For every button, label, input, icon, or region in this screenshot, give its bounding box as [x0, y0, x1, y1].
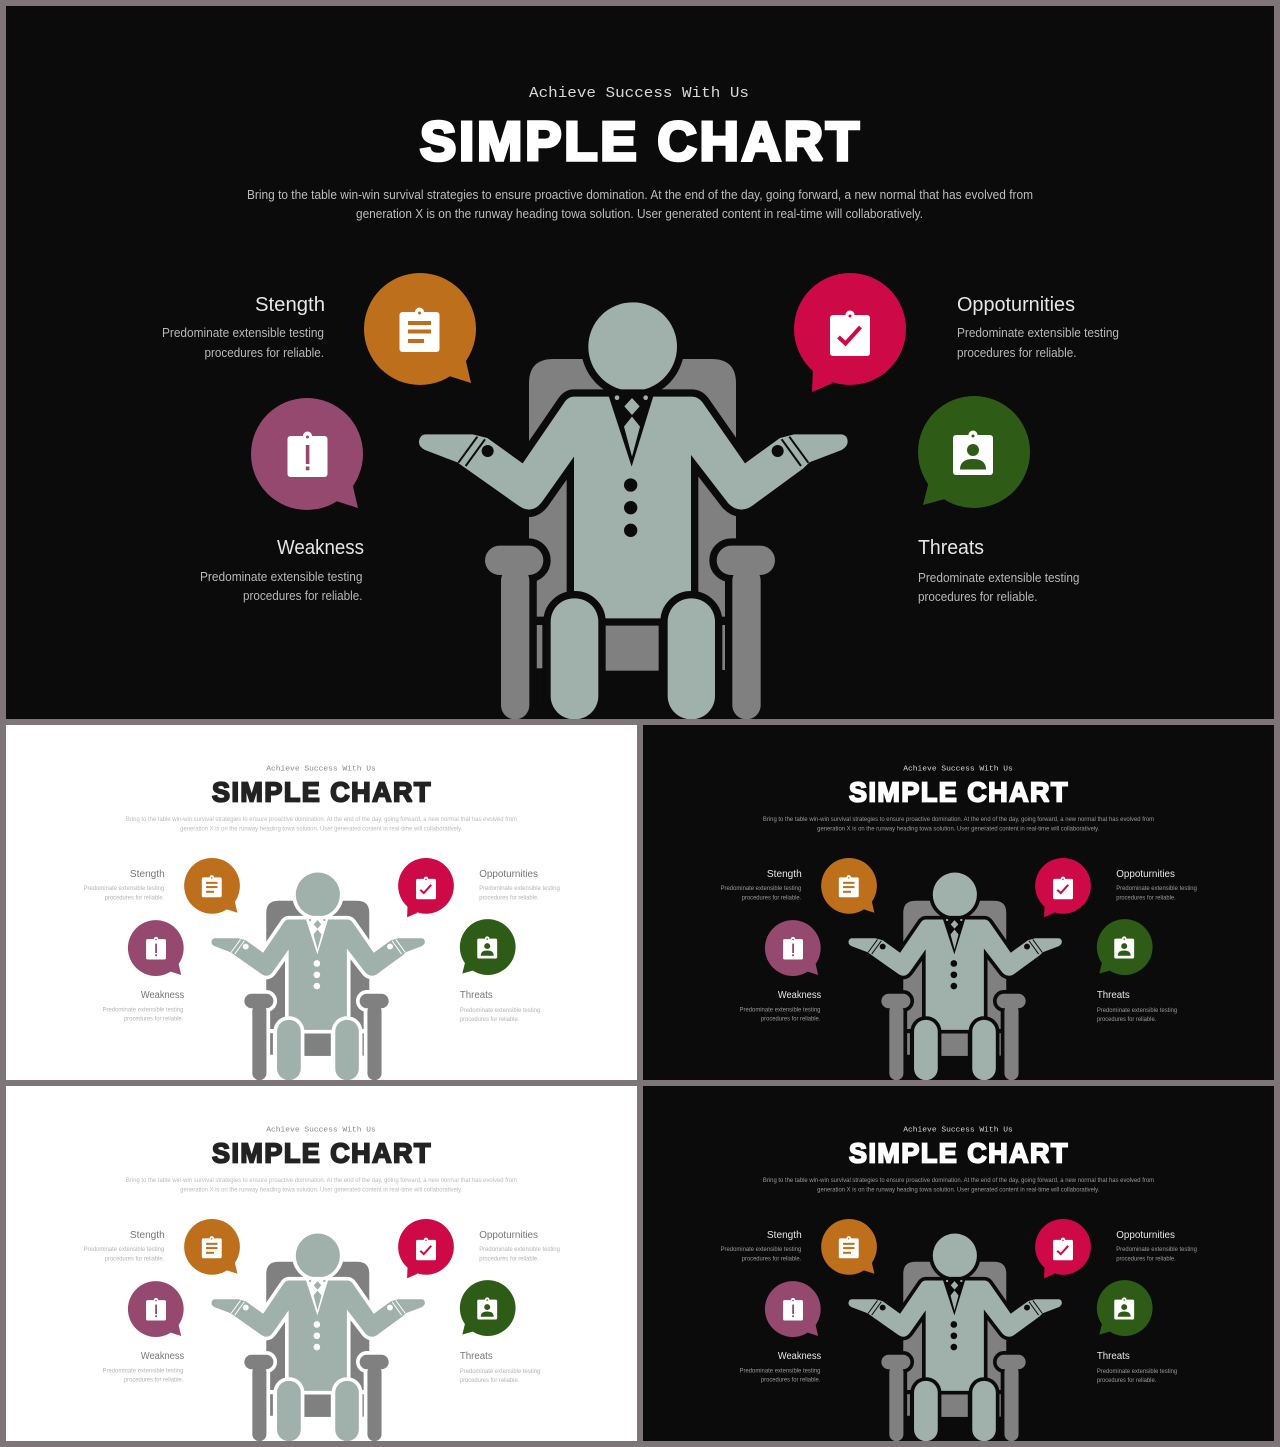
text: opportunities: Oppoturnities	[1116, 869, 1175, 880]
text: opportunities	[479, 869, 560, 902]
text: weakness	[200, 537, 364, 603]
bubble: strength	[184, 1219, 240, 1275]
figure: man in chair	[848, 1234, 1062, 1441]
text: threats	[1097, 1351, 1178, 1384]
text: threats	[460, 990, 541, 1023]
text: threats: Threats	[1097, 990, 1130, 1001]
text: opportunities: procedures for reliable.	[957, 346, 1076, 360]
panel: dark slide, row 2	[643, 1086, 1274, 1441]
text: strength: Stength	[767, 1230, 802, 1241]
bubble: opportunities	[398, 1219, 454, 1278]
text: opportunities: Predominate extensible testing	[479, 885, 560, 892]
bubble: opportunities	[398, 858, 454, 917]
text: weakness	[740, 990, 821, 1023]
text: weakness: procedures for reliable.	[761, 1016, 821, 1023]
text: threats: Threats	[460, 990, 493, 1001]
text: strength	[721, 1230, 802, 1263]
text: threats: Predominate extensible testing	[1097, 1368, 1178, 1375]
title: SIMPLE CHART	[849, 777, 1069, 808]
intro paragraph: generation X is on the runway heading towa solution. User generated content in real-time will collaboratively.	[817, 1187, 1100, 1194]
text: strength: procedures for reliable.	[105, 895, 164, 902]
text: threats: Predominate extensible testing	[918, 571, 1080, 585]
text: weakness: Weakness	[778, 990, 821, 1001]
text: threats: Predominate extensible testing	[460, 1007, 541, 1014]
text: strength: Stength	[130, 1230, 165, 1241]
bubble: threats	[460, 919, 516, 975]
bubble: opportunities	[1035, 1219, 1091, 1278]
panel: light slide, row 1	[6, 725, 637, 1080]
text: strength	[721, 869, 802, 902]
text: opportunities: procedures for reliable.	[479, 1256, 539, 1263]
panel: dark slide, row 1	[643, 725, 1274, 1080]
text: strength: Predominate extensible testing	[84, 1246, 165, 1253]
text: weakness: Predominate extensible testing	[740, 1006, 821, 1013]
bubble: threats	[918, 396, 1030, 508]
panel: light slide, row 2	[6, 1086, 637, 1441]
bubble: threats	[460, 1280, 516, 1336]
bubble: weakness	[128, 1281, 184, 1337]
intro paragraph: Bring to the table win-win survival strategies to ensure proactive domination. At the end of the day, going forward, a new normal that has evolved from	[126, 1177, 517, 1184]
text: opportunities: Oppoturnities	[1116, 1230, 1175, 1241]
bubble: weakness	[765, 920, 821, 976]
intro paragraph: Bring to the table win-win survival strategies to ensure proactive domination. At the end of the day, going forward, a new normal that has evolved from	[126, 816, 517, 823]
text: weakness: Predominate extensible testing	[200, 570, 363, 584]
intro paragraph: generation X is on the runway heading towa solution. User generated content in real-time will collaboratively.	[817, 826, 1100, 833]
intro paragraph: generation X is on the runway heading towa solution. User generated content in real-time will collaboratively.	[180, 826, 463, 833]
text: weakness	[103, 1351, 184, 1384]
text: opportunities: Predominate extensible testing	[1116, 885, 1197, 892]
text: opportunities: procedures for reliable.	[1116, 895, 1176, 902]
text: opportunities: Predominate extensible testing	[479, 1246, 560, 1253]
text: weakness: procedures for reliable.	[124, 1016, 184, 1023]
intro paragraph: Bring to the table win-win survival strategies to ensure proactive domination. At the end of the day, going forward, a new normal that has evolved from	[763, 1177, 1154, 1184]
text: opportunities: Oppoturnities	[479, 1230, 538, 1241]
text: opportunities: procedures for reliable.	[1116, 1256, 1176, 1263]
text: weakness: Predominate extensible testing	[740, 1367, 821, 1374]
bubble: strength	[821, 858, 877, 914]
title: SIMPLE CHART	[212, 1138, 432, 1169]
text: strength: Stength	[255, 294, 325, 316]
text: strength: Predominate extensible testing	[162, 326, 324, 340]
bubble: strength	[364, 273, 476, 385]
text: threats	[460, 1351, 541, 1384]
text: opportunities	[1116, 1230, 1197, 1263]
text: threats: Predominate extensible testing	[460, 1368, 541, 1375]
figure: man in chair	[419, 302, 848, 719]
bubble: weakness	[128, 920, 184, 976]
text: opportunities: Oppoturnities	[479, 869, 538, 880]
bubble: weakness	[765, 1281, 821, 1337]
intro paragraph	[247, 188, 1033, 221]
eyebrow text: Achieve Success With Us	[903, 1126, 1013, 1134]
text: strength: procedures for reliable.	[105, 1256, 164, 1263]
title: SIMPLE CHART	[849, 1138, 1069, 1169]
bubble: strength	[821, 1219, 877, 1275]
text: weakness: Weakness	[778, 1351, 821, 1362]
text: strength: Stength	[130, 869, 165, 880]
intro paragraph: generation X is on the runway heading towa solution. User generated content in real-time will collaboratively.	[356, 207, 923, 221]
text: strength: Stength	[767, 869, 802, 880]
intro paragraph	[763, 1177, 1154, 1194]
bubble: threats	[1097, 919, 1153, 975]
eyebrow text: Achieve Success With Us	[903, 765, 1013, 773]
text: threats: Threats	[1097, 1351, 1130, 1362]
text: opportunities: procedures for reliable.	[479, 895, 539, 902]
eyebrow text: Achieve Success With Us	[266, 1126, 376, 1134]
text: threats: procedures for reliable.	[918, 590, 1038, 604]
bubble: opportunities	[794, 273, 906, 392]
text: strength	[84, 1230, 165, 1263]
eyebrow text: Achieve Success With Us	[266, 765, 376, 773]
text: weakness: Weakness	[141, 990, 184, 1001]
panel: main dark slide	[6, 6, 1274, 719]
bubble: threats	[1097, 1280, 1153, 1336]
intro paragraph: Bring to the table win-win survival strategies to ensure proactive domination. At the end of the day, going forward, a new normal that has evolved from	[763, 816, 1154, 823]
text: strength	[84, 869, 165, 902]
text: opportunities	[479, 1230, 560, 1263]
text: strength: Predominate extensible testing	[721, 885, 802, 892]
text: weakness: procedures for reliable.	[243, 589, 362, 603]
eyebrow text: Achieve Success With Us	[529, 86, 749, 102]
intro paragraph	[763, 816, 1154, 833]
bubble: opportunities	[1035, 858, 1091, 917]
intro paragraph: Bring to the table win-win survival strategies to ensure proactive domination. At the end of the day, going forward, a new normal that has evolved from	[247, 188, 1033, 202]
intro paragraph: generation X is on the runway heading towa solution. User generated content in real-time will collaboratively.	[180, 1187, 463, 1194]
text: opportunities: Oppoturnities	[957, 294, 1075, 316]
intro paragraph	[126, 1177, 517, 1194]
text: strength: procedures for reliable.	[742, 895, 801, 902]
title: SIMPLE CHART	[212, 777, 432, 808]
text: threats: Predominate extensible testing	[1097, 1007, 1178, 1014]
bubble: strength	[184, 858, 240, 914]
text: strength	[162, 294, 325, 360]
text: threats: procedures for reliable.	[1097, 1377, 1157, 1384]
figure: man in chair	[211, 1234, 425, 1441]
text: opportunities	[957, 294, 1119, 360]
figure: man in chair	[211, 873, 425, 1080]
text: threats: procedures for reliable.	[460, 1016, 520, 1023]
text: weakness: Weakness	[277, 537, 364, 559]
text: threats: procedures for reliable.	[460, 1377, 520, 1384]
text: strength: procedures for reliable.	[204, 346, 324, 360]
text: opportunities: Predominate extensible testing	[957, 326, 1119, 340]
text: threats: procedures for reliable.	[1097, 1016, 1157, 1023]
text: weakness: Predominate extensible testing	[103, 1006, 184, 1013]
text: strength: procedures for reliable.	[742, 1256, 801, 1263]
text: weakness: Weakness	[141, 1351, 184, 1362]
text: threats	[1097, 990, 1178, 1023]
figure: man in chair	[848, 873, 1062, 1080]
text: threats: Threats	[918, 537, 984, 559]
bubble: weakness	[251, 398, 363, 510]
text: opportunities	[1116, 869, 1197, 902]
text: weakness: procedures for reliable.	[761, 1377, 821, 1384]
text: weakness: Predominate extensible testing	[103, 1367, 184, 1374]
text: strength: Predominate extensible testing	[721, 1246, 802, 1253]
text: strength: Predominate extensible testing	[84, 885, 165, 892]
text: threats	[918, 537, 1080, 604]
text: weakness	[740, 1351, 821, 1384]
title: SIMPLE CHART	[420, 110, 862, 172]
text: threats: Threats	[460, 1351, 493, 1362]
text: weakness: procedures for reliable.	[124, 1377, 184, 1384]
text: weakness	[103, 990, 184, 1023]
text: opportunities: Predominate extensible testing	[1116, 1246, 1197, 1253]
intro paragraph	[126, 816, 517, 833]
